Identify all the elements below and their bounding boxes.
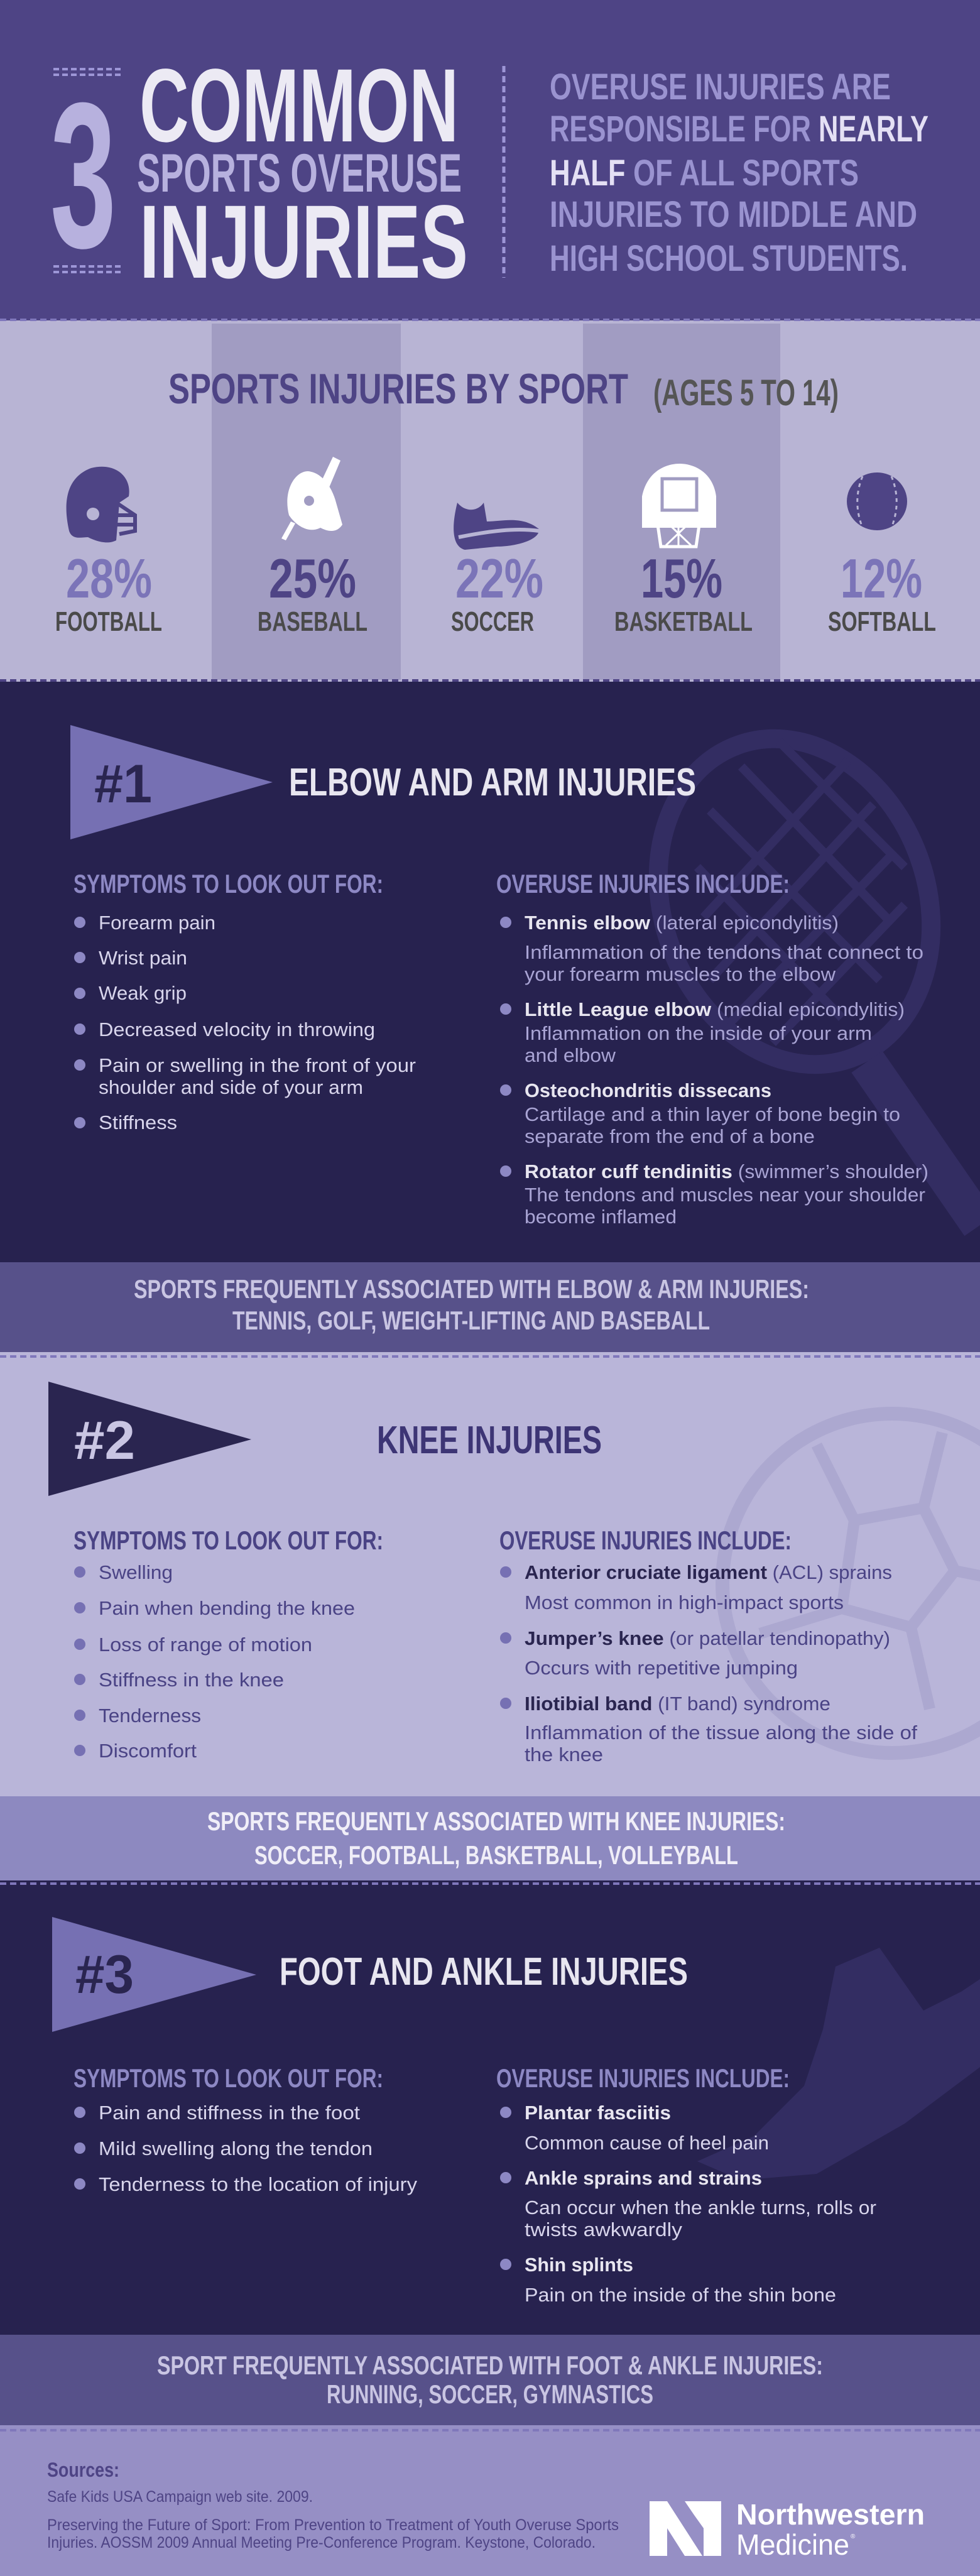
band: sports associated with elbow & arm <box>0 1262 980 1352</box>
overuse injuries list 3: Plantar fasciitis <box>525 2102 671 2124</box>
symptoms list 1: Decreased velocity in throwing <box>99 1018 375 1040</box>
overuse injuries list 1: separate from the end of a bone <box>525 1125 815 1147</box>
watermark: shoe <box>697 1948 980 2180</box>
overuse injuries list 1: Cartilage and a thin layer of bone begin to <box>525 1103 900 1125</box>
icon: football helmet <box>67 467 135 542</box>
overuse injuries list 1: OVERUSE INJURIES INCLUDE: <box>496 869 790 898</box>
pennant #3: #3 <box>75 1945 134 2005</box>
stats: percentages and labels: 22% <box>455 547 543 609</box>
overuse injuries list 3: twists awkwardly <box>525 2219 683 2240</box>
icon: softball <box>847 472 907 530</box>
symptoms list 2: Swelling <box>99 1561 173 1583</box>
overuse injuries list 1: Rotator cuff tendinitis (swimmer’s shoulder) <box>525 1160 928 1182</box>
symptoms list 2 <box>74 1525 383 1762</box>
overuse injuries list 1: Little League elbow (medial epicondylitis) <box>525 998 905 1020</box>
overuse injuries list 1: Inflammation on the inside of your arm <box>525 1022 872 1044</box>
symptoms list 1: SYMPTOMS TO LOOK OUT FOR: <box>74 869 383 898</box>
sources <box>47 2459 619 2551</box>
stats: percentages and labels <box>55 547 936 637</box>
overuse injuries list 1: Tennis elbow (lateral epicondylitis) <box>525 912 839 934</box>
sports band background <box>0 320 980 682</box>
overuse injuries list 3: OVERUSE INJURIES INCLUDE: <box>496 2063 790 2093</box>
symptoms list 2: Loss of range of motion <box>99 1634 312 1656</box>
overuse injuries list 3: Pain on the inside of the shin bone <box>525 2284 836 2306</box>
symptoms list 2: Stiffness in the knee <box>99 1669 284 1691</box>
overuse injuries list 2: Iliotibial band (IT band) syndrome <box>525 1693 830 1715</box>
stats: percentages and labels: FOOTBALL <box>55 606 162 637</box>
symptoms list 1: Pain or swelling in the front of your <box>99 1054 416 1076</box>
logo: Northwestern Medicine: Northwestern <box>736 2498 925 2531</box>
header: title block: SPORTS OVERUSE <box>137 143 462 204</box>
stats: percentages and labels: 15% <box>641 547 722 609</box>
overuse injuries list 2: Anterior cruciate ligament (ACL) sprains <box>525 1561 892 1583</box>
symptoms list 2: Tenderness <box>99 1705 201 1727</box>
overuse injuries list 3: Ankle sprains and strains <box>525 2167 762 2189</box>
title: foot and ankle injuries: FOOT AND ANKLE INJURIES <box>280 1950 688 1994</box>
pennant #1 <box>70 725 273 839</box>
header: title block <box>50 48 468 300</box>
header background <box>0 0 980 320</box>
band: sport associated with foot & ankle <box>0 2335 980 2425</box>
overuse injuries list 3: Common cause of heel pain <box>525 2132 769 2154</box>
overuse injuries list 1: your forearm muscles to the elbow <box>525 963 836 985</box>
pennant #3 <box>52 1917 256 2032</box>
overuse injuries list 3: Shin splints <box>525 2254 633 2276</box>
stats: percentages and labels: BASEBALL <box>258 606 368 637</box>
symptoms list 3 <box>74 2063 418 2195</box>
overuse injuries list 2 <box>499 1525 917 1766</box>
stats: percentages and labels: SOFTBALL <box>828 606 936 637</box>
symptoms list 3: Mild swelling along the tendon <box>99 2137 373 2159</box>
sources: Preserving the Future of Sport: From Prevention to Treatment of Youth Overuse Sports <box>47 2516 619 2534</box>
header: intro statement: OVERUSE INJURIES ARE <box>550 67 891 107</box>
overuse injuries list 1: Inflammation of the tendons that connect to <box>525 941 923 963</box>
pennant #2 <box>48 1382 251 1496</box>
overuse injuries list 2: OVERUSE INJURIES INCLUDE: <box>499 1525 792 1555</box>
stats: percentages and labels: 28% <box>66 547 152 609</box>
overuse injuries list 2: Inflammation of the tissue along the side of <box>525 1722 917 1744</box>
symptoms list 2: Discomfort <box>99 1740 197 1762</box>
band: sports associated with knee <box>0 1796 980 1880</box>
overuse injuries list 3 <box>496 2063 876 2306</box>
overuse injuries list 2: Jumper’s knee (or patellar tendinopathy) <box>525 1627 890 1649</box>
overuse injuries list 1: become inflamed <box>525 1206 677 1228</box>
header: intro statement: HALF OF ALL SPORTS <box>550 153 859 194</box>
header: title block: INJURIES <box>139 184 468 300</box>
symptoms list 1: Stiffness <box>99 1111 177 1133</box>
sports injuries title: SPORTS INJURIES BY SPORT <box>168 365 628 413</box>
header: intro statement: RESPONSIBLE FOR NEARLY <box>550 109 928 150</box>
band: sport associated with foot & ankle: RUNNING, SOCCER, GYMNASTICS <box>327 2379 653 2409</box>
header: intro statement <box>550 67 928 279</box>
band: sports associated with elbow & arm: TENNIS, GOLF, WEIGHT-LIFTING AND BASEBALL <box>232 1306 710 1335</box>
icon: basketball hoop <box>642 464 716 547</box>
sources: Injuries. AOSSM 2009 Annual Meeting Pre-Conference Program. Keystone, Colorado. <box>47 2534 596 2551</box>
sports injuries title: (AGES 5 TO 14) <box>653 373 839 413</box>
logo: Northwestern Medicine: Medicine <box>736 2528 849 2561</box>
overuse injuries list 2: Occurs with repetitive jumping <box>525 1657 798 1679</box>
symptoms list 3: SYMPTOMS TO LOOK OUT FOR: <box>74 2063 383 2093</box>
band: sports associated with knee: SPORTS FREQUENTLY ASSOCIATED WITH KNEE INJURIES: <box>207 1806 785 1836</box>
band: sports associated with knee: SOCCER, FOOTBALL, BASKETBALL, VOLLEYBALL <box>254 1840 738 1870</box>
icon: soccer cleat <box>454 503 539 550</box>
header: title block: 3 <box>50 59 116 291</box>
logo: Northwestern Medicine: ® <box>851 2533 856 2540</box>
symptoms list 2: SYMPTOMS TO LOOK OUT FOR: <box>74 1525 383 1555</box>
symptoms list 1 <box>74 869 416 1133</box>
stats: percentages and labels: 25% <box>269 547 356 609</box>
stats: percentages and labels: SOCCER <box>451 606 534 637</box>
title: knee injuries: KNEE INJURIES <box>377 1419 602 1462</box>
overuse injuries list 3: Can occur when the ankle turns, rolls or <box>525 2197 876 2219</box>
watermark: tennis racket <box>614 700 980 1225</box>
overuse injuries list 1 <box>496 869 928 1228</box>
overuse injuries list 1: and elbow <box>525 1044 616 1066</box>
section 2 background <box>0 1352 980 1797</box>
symptoms list 1: Forearm pain <box>99 912 215 934</box>
overuse injuries list 1: The tendons and muscles near your shoulder <box>525 1184 925 1206</box>
pennant #2: #2 <box>74 1411 135 1471</box>
symptoms list 1: shoulder and side of your arm <box>99 1076 363 1098</box>
overuse injuries list 1: Osteochondritis dissecans <box>525 1079 771 1101</box>
watermark: soccer ball <box>722 1414 980 1753</box>
symptoms list 2: Pain when bending the knee <box>99 1597 355 1619</box>
sources: Safe Kids USA Campaign web site. 2009. <box>47 2488 313 2506</box>
stats: percentages and labels: BASKETBALL <box>614 606 753 637</box>
pennant #1: #1 <box>94 754 152 814</box>
logo: Northwestern Medicine <box>650 2498 925 2561</box>
icon: baseball helmet and bat <box>281 457 342 540</box>
section 3 background <box>0 1880 980 2335</box>
section 1 background <box>0 682 980 1263</box>
stats: percentages and labels: 12% <box>841 547 922 609</box>
symptoms list 3: Pain and stiffness in the foot <box>99 2102 360 2124</box>
title: elbow and arm injuries: ELBOW AND ARM INJURIES <box>289 761 696 804</box>
symptoms list 1: Weak grip <box>99 982 187 1004</box>
sources: Sources: <box>47 2459 119 2481</box>
overuse injuries list 2: Most common in high-impact sports <box>525 1591 844 1613</box>
symptoms list 1: Wrist pain <box>99 947 187 969</box>
symptoms list 3: Tenderness to the location of injury <box>99 2173 418 2195</box>
overuse injuries list 2: the knee <box>525 1744 603 1766</box>
footer background <box>0 2425 980 2576</box>
header: title block: COMMON <box>139 48 459 164</box>
